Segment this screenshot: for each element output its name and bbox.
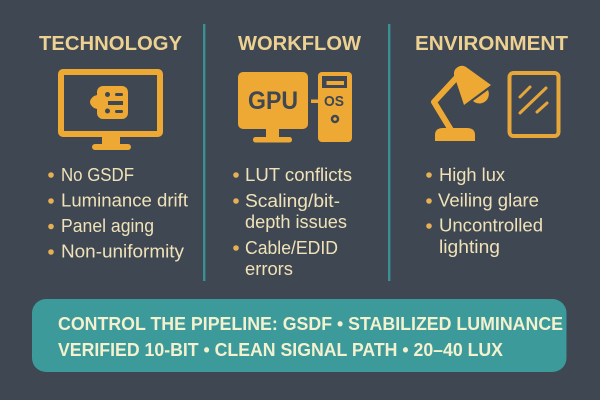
callout banner (32, 299, 566, 372)
bullet list: technology: Luminance drift (61, 190, 188, 210)
banner text line 1: CONTROL THE PIPELINE: GSDF • STABILIZED LUMINANCE (58, 314, 563, 334)
heading: technology: TECHNOLOGY (39, 32, 182, 55)
bullet list: technology: Panel aging (61, 216, 154, 236)
panel: environment (415, 32, 568, 257)
panel: technology (39, 32, 188, 262)
icon: GPU monitor and OS tower: GPU (248, 87, 298, 115)
heading: environment: ENVIRONMENT (415, 32, 568, 55)
bullet list: environment: lighting (439, 237, 500, 257)
icon: mirror with glare (510, 73, 558, 136)
bullet list: environment: Uncontrolled (439, 216, 543, 236)
icon: monitor with chip (61, 72, 160, 150)
icon: desk lamp (434, 66, 491, 141)
heading: workflow: WORKFLOW (238, 32, 362, 55)
bullet list: workflow: LUT conflicts (245, 165, 352, 185)
bullet list: workflow: errors (245, 259, 293, 279)
bullet list: technology (48, 165, 188, 262)
panel: workflow (233, 32, 362, 279)
icon: GPU monitor and OS tower (238, 72, 352, 142)
bullet list: environment (426, 165, 543, 257)
bullet list: workflow: depth issues (245, 212, 347, 232)
bullet list: environment: Veiling glare (438, 190, 539, 210)
bullet list: workflow (233, 165, 352, 279)
bullet list: workflow: Cable/EDID (245, 238, 338, 258)
bullet list: technology: Non-uniformity (61, 242, 184, 262)
bullet list: technology: No GSDF (61, 165, 134, 185)
bullet list: environment: High lux (439, 165, 505, 185)
banner text line 2: VERIFIED 10-BIT • CLEAN SIGNAL PATH • 20–40 LUX (58, 340, 503, 360)
icon: GPU monitor and OS tower: OS (324, 93, 344, 110)
bullet list: workflow: Scaling/bit- (245, 191, 340, 211)
